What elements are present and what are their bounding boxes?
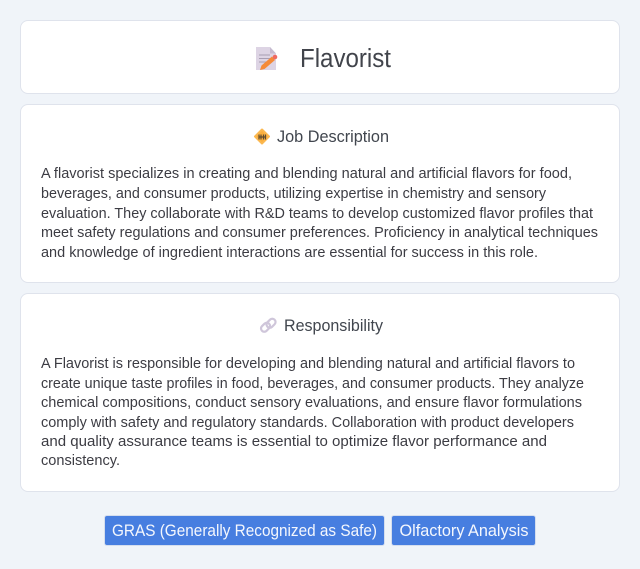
tag label: GRAS: GRAS (Generally Recognized as Safe) <box>112 522 377 540</box>
heading: job description: Job Description <box>277 127 389 146</box>
text: responsibility <box>41 355 584 469</box>
icon: document with pencil <box>256 47 277 70</box>
tag label: olfactory analysis: Olfactory Analysis <box>400 522 528 540</box>
heading: responsibility: Responsibility <box>284 316 384 335</box>
text: responsibility: comply with safety and regulatory standards. Collaboration with product developers <box>41 414 574 431</box>
title: Flavorist <box>300 45 391 73</box>
panel: job description card <box>20 104 620 283</box>
tag: GRAS background <box>105 516 384 545</box>
text: responsibility: consistency. <box>41 452 120 469</box>
text: job description: and knowledge of ingredient interactions are essential for success in this role. <box>41 244 538 261</box>
text: responsibility: create unique taste profiles in food, beverages, and consumer products. They analyze <box>41 375 584 392</box>
text: job description: A flavorist specializes in creating and blending natural and artificial flavors for food, <box>41 165 572 182</box>
text: responsibility: chemical compositions, conduct sensory evaluations, and ensure flavor formulations <box>41 394 582 411</box>
tag: olfactory analysis background <box>392 516 535 545</box>
text: job description: meet safety regulations and consumer preferences. Proficiency in analytical techniques <box>41 224 598 241</box>
icon: diamond road sign <box>255 130 269 144</box>
icon: chain link <box>260 317 277 333</box>
text: job description: beverages, and consumer products, utilizing expertise in chemistry and sensory <box>41 185 546 202</box>
panel: responsibility card <box>20 293 620 492</box>
panel: title card <box>20 20 620 94</box>
text: responsibility: A Flavorist is responsible for developing and blending natural and artificial flavors to <box>41 355 575 372</box>
text: job description: evaluation. They collaborate with R&D teams to develop customized flavor profiles that <box>41 205 594 222</box>
text: responsibility: and quality assurance teams is essential to optimize flavor performance and <box>41 433 547 450</box>
text: job description <box>41 165 598 261</box>
